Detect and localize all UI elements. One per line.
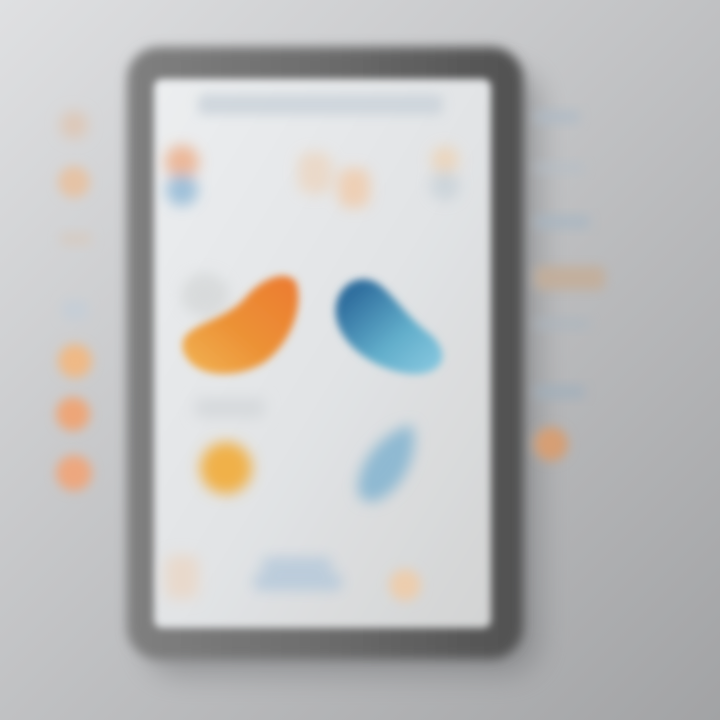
icon 3 bbox=[60, 232, 92, 246]
blue leaf icon bbox=[358, 425, 414, 502]
top left icon bbox=[165, 145, 199, 206]
icon 6 bbox=[56, 397, 90, 431]
bottom center text bbox=[254, 558, 342, 590]
orange circle icon bbox=[200, 442, 252, 494]
right column labels bbox=[534, 110, 605, 461]
label 6 bbox=[535, 385, 585, 399]
tablet device bbox=[127, 47, 523, 659]
label 2 bbox=[535, 162, 585, 174]
tablet shadow bbox=[145, 70, 540, 675]
orange leaf chart bbox=[181, 273, 298, 374]
top center icons bbox=[298, 152, 370, 208]
label 5 bbox=[535, 318, 590, 330]
icon 1 bbox=[60, 111, 88, 139]
top right icon bbox=[430, 146, 460, 201]
icon 7 bbox=[56, 455, 92, 491]
caption text left bbox=[195, 398, 265, 418]
orange icon bbox=[534, 427, 568, 461]
tablet frame bbox=[127, 47, 523, 659]
icon 2 bbox=[58, 166, 90, 198]
bottom left icon bbox=[165, 555, 199, 599]
bottom right icon bbox=[389, 569, 421, 601]
icon 5 bbox=[58, 344, 92, 378]
left column icons bbox=[56, 111, 92, 491]
label 3 bbox=[535, 215, 590, 229]
label 1 bbox=[535, 110, 580, 124]
tablet screen bbox=[154, 79, 491, 628]
icon 4 bbox=[62, 300, 88, 320]
blue leaf chart bbox=[335, 279, 442, 374]
label 4 orange bbox=[535, 266, 605, 290]
screen heading bbox=[198, 94, 443, 115]
